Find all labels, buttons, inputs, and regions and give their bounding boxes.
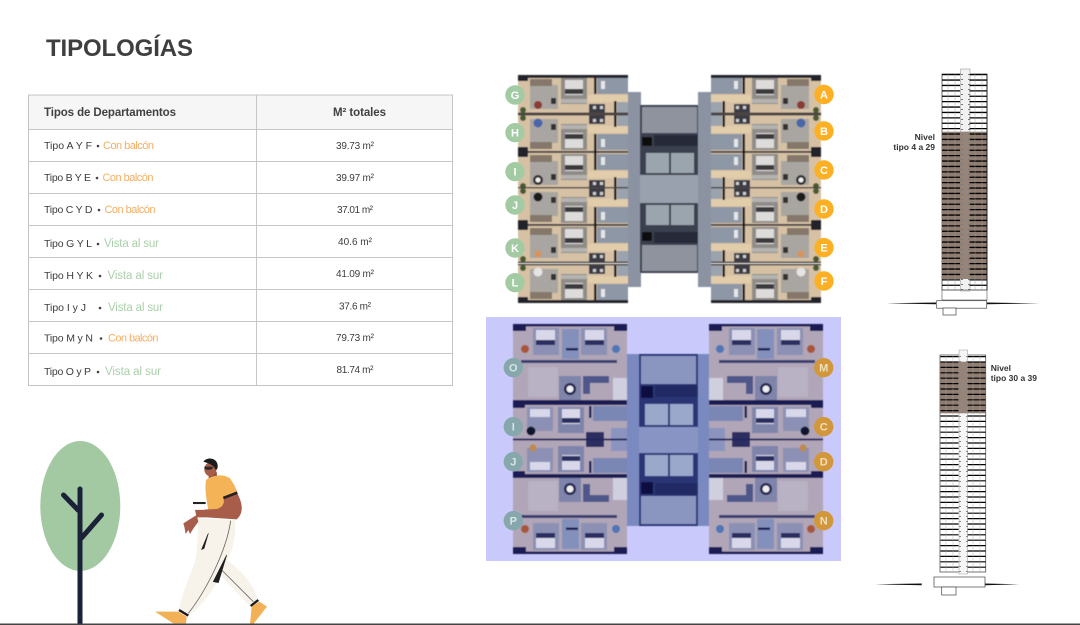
table header [44,107,386,119]
row: tipo M y N: Tipo M y N [44,332,93,344]
row: tipo B y E: 39.97 m² [336,173,375,184]
row: tipo G y L: 40.6 m² [338,237,373,248]
unit badges left: J [512,200,518,212]
unit badges right: D [820,204,828,216]
unit badges right: M [819,363,828,375]
unit badges right [814,358,833,530]
unit badges right: C [820,165,828,177]
row: tipo A y F: Tipo A Y F [44,140,92,152]
level label: Nivel [991,363,1011,373]
row: tipo C y D: Con balcón [104,204,156,216]
tower base [875,577,1020,595]
unit badges left: O [509,363,518,375]
row: tipo C y D [44,204,374,216]
level label: tipo 30 a 39 [991,373,1037,383]
tower base [887,290,1040,315]
unit badges left: I [513,167,517,179]
row: tipo I y J: 37.6 m² [339,302,372,312]
tower elevation: levels 4 to 29 [887,69,1040,315]
unit badges left: I [512,422,515,434]
row: tipo H y K: 41.09 m² [336,269,375,280]
unit badges left: L [512,278,519,290]
illustration: tree [40,441,120,624]
row: tipo H y K: Vista al sur [108,270,163,282]
unit badges right: A [820,90,828,102]
unit badges left: J [510,457,516,469]
row: tipo A y F: 39.73 m² [336,141,375,152]
row: tipo O y P: Vista al sur [105,366,161,378]
row: tipo B y E: Tipo B Y E [44,172,91,184]
row: tipo I y J: Vista al sur [108,302,163,314]
row: tipo A y F [44,140,375,152]
row: tipo O y P: 81.74 m² [336,365,374,376]
row: tipo G y L: Vista al sur [104,238,159,250]
row: tipo C y D: Tipo C Y D [44,204,93,216]
floor plan: levels 4 to 29 [505,75,834,303]
unit badges left [505,85,525,292]
unit badges right: E [820,243,828,255]
row: tipo G y L: Tipo G Y L [44,238,92,250]
unit badges right: B [820,126,828,138]
row: tipo C y D: 37.01 m² [337,205,374,216]
row: tipo H y K: Tipo H Y K [44,270,93,282]
row: tipo H y K [44,269,375,282]
level label: Nivel [915,132,935,142]
level label [893,132,935,152]
unit badges left [504,358,523,530]
table header: M² totales [333,107,386,119]
row: tipo I y J: Tipo I y J [44,302,86,314]
row: tipo O y P: Tipo O y P [44,366,91,378]
row: tipo I y J [44,302,372,314]
unit badges right: F [821,276,828,288]
row: tipo M y N: 79.73 m² [336,333,375,344]
floor plan: levels 30 to 39 [486,317,841,561]
unit badges left: P [510,516,517,528]
table header: Tipos de Departamentos [44,107,176,119]
level label [991,363,1037,383]
ground line [0,624,1080,625]
title: TIPOLOGÍAS [46,34,193,62]
row: tipo A y F: Con balcón [103,140,154,152]
row: tipo B y E [44,172,375,184]
unit badges left: H [511,128,519,140]
level label: tipo 4 a 29 [893,142,935,152]
unit badges right: C [820,422,828,434]
unit badges right: N [820,516,828,528]
unit badges left: G [511,90,519,102]
unit badges right: D [820,457,828,469]
unit badges left: K [511,243,519,255]
unit badges right [814,85,834,291]
table: types of apartments [28,95,453,386]
row: tipo M y N [44,332,375,344]
illustration: walking person [155,458,267,624]
tower elevation: levels 30 to 39 [875,350,1037,595]
row: tipo G y L [44,237,373,250]
row: tipo B y E: Con balcón [102,172,154,184]
row: tipo O y P [44,365,374,378]
row: tipo M y N: Con balcón [108,332,158,344]
